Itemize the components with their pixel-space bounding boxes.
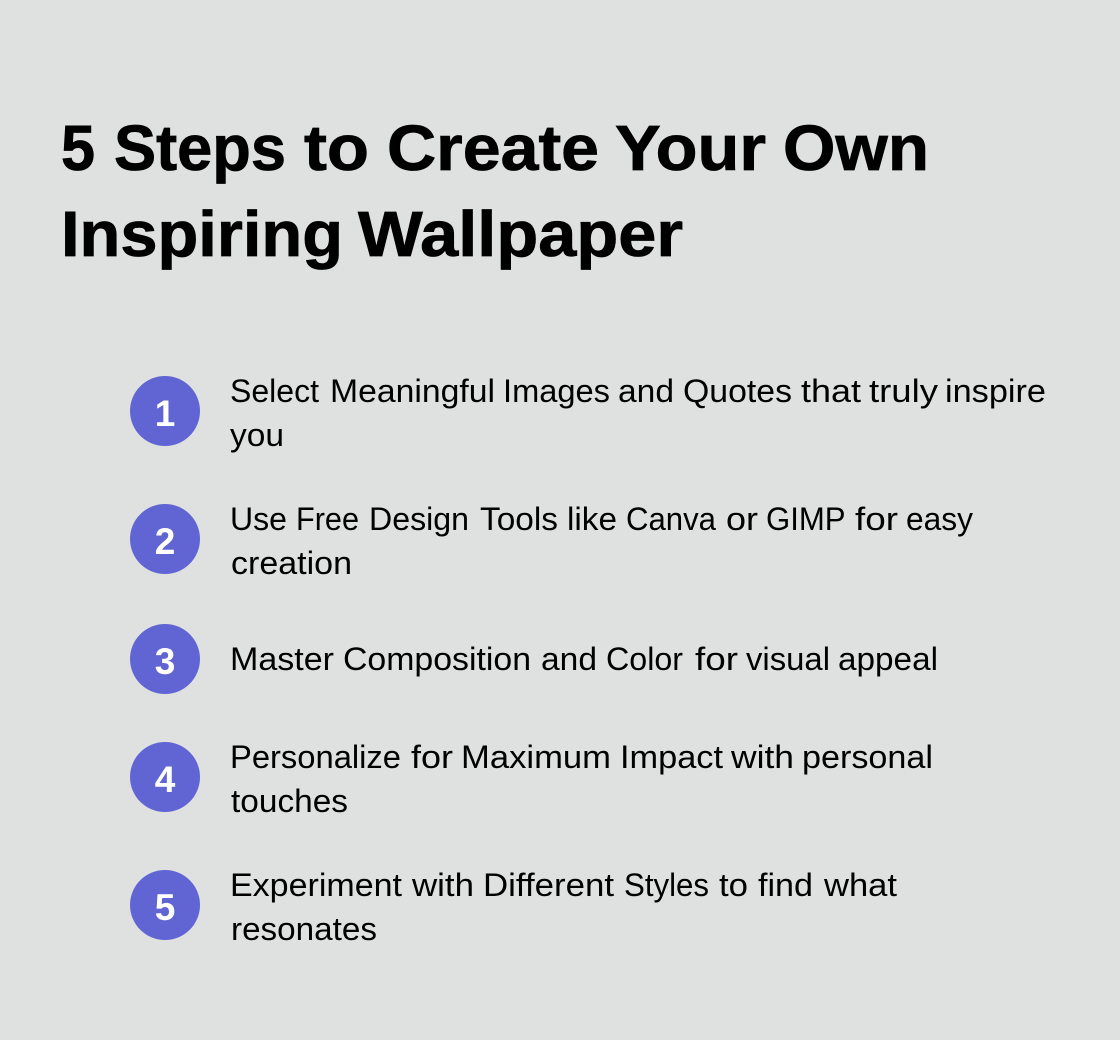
step 2 text bbox=[230, 501, 973, 581]
step 3 text: Master bbox=[230, 641, 334, 677]
step 3 text: appeal bbox=[838, 641, 938, 677]
step 2 text: Use bbox=[230, 501, 287, 537]
step 4 text: touches bbox=[231, 783, 348, 819]
step 1 text: and bbox=[618, 373, 674, 409]
step 5 text bbox=[230, 867, 897, 947]
step 4 number badge: 4 bbox=[155, 759, 176, 800]
title: Inspiring bbox=[61, 198, 343, 270]
title: to bbox=[304, 112, 369, 184]
step 5 text: what bbox=[823, 867, 897, 903]
step 5 text: Styles bbox=[624, 867, 709, 903]
step 2 text: easy bbox=[906, 501, 973, 537]
title bbox=[61, 112, 929, 270]
title: Wallpaper bbox=[358, 198, 683, 270]
step 4 text: Personalize bbox=[230, 739, 401, 775]
step 5 text: find bbox=[758, 867, 813, 903]
step 1 text: you bbox=[230, 417, 284, 453]
step 5 text: resonates bbox=[231, 911, 377, 947]
step 2 number badge bbox=[130, 504, 200, 574]
step 5 text: Experiment bbox=[230, 867, 402, 903]
step 3 text: and bbox=[541, 641, 597, 677]
step 1 text: Images bbox=[503, 373, 610, 409]
step 4 text bbox=[230, 739, 933, 819]
step 4 bbox=[130, 739, 933, 819]
step 1 text: inspire bbox=[945, 373, 1046, 409]
step 2 text: GIMP bbox=[766, 501, 845, 537]
title: Your bbox=[615, 112, 766, 184]
step 5 number badge: 5 bbox=[155, 887, 175, 928]
step 1 number badge: 1 bbox=[155, 393, 175, 434]
step 1 number badge bbox=[130, 376, 200, 446]
step 2 number badge: 2 bbox=[155, 521, 175, 562]
step 1 text: Quotes bbox=[683, 373, 792, 409]
step 2 text: like bbox=[567, 501, 617, 537]
step 4 text: for bbox=[411, 739, 453, 775]
step 3 bbox=[130, 624, 938, 694]
step 2 text: creation bbox=[231, 545, 352, 581]
step 3 number badge: 3 bbox=[155, 641, 175, 682]
step 2 text: Design bbox=[369, 501, 469, 537]
steps list bbox=[130, 373, 1046, 947]
step 2 text: Tools bbox=[480, 501, 558, 537]
step 2 text: or bbox=[726, 501, 758, 537]
step 3 text: Composition bbox=[343, 641, 531, 677]
step 5 text: Different bbox=[483, 867, 614, 903]
step 5 text: to bbox=[719, 867, 748, 903]
step 1 text: that bbox=[801, 373, 861, 409]
step 2 bbox=[130, 501, 973, 581]
step 3 text: Color bbox=[606, 641, 683, 677]
step 1 text bbox=[230, 373, 1046, 453]
step 3 number badge bbox=[130, 624, 200, 694]
step 5 text: with bbox=[411, 867, 474, 903]
step 1 text: Select bbox=[230, 373, 319, 409]
step 4 text: personal bbox=[802, 739, 933, 775]
title: 5 bbox=[61, 112, 95, 184]
step 3 text: for bbox=[695, 641, 738, 677]
step 4 text: with bbox=[730, 739, 794, 775]
step 4 text: Impact bbox=[620, 739, 723, 775]
step 5 number badge bbox=[130, 870, 200, 940]
step 4 number badge bbox=[130, 742, 200, 812]
title: Own bbox=[783, 112, 929, 184]
step 3 text: visual bbox=[746, 641, 830, 677]
title: Steps bbox=[114, 112, 286, 184]
title: Create bbox=[387, 112, 599, 184]
step 1 bbox=[130, 373, 1046, 453]
step 2 text: for bbox=[855, 501, 898, 537]
step 1 text: truly bbox=[869, 373, 938, 409]
step 2 text: Canva bbox=[626, 501, 716, 537]
step 5 bbox=[130, 867, 897, 947]
step 2 text: Free bbox=[296, 501, 359, 537]
step 4 text: Maximum bbox=[461, 739, 611, 775]
step 1 text: Meaningful bbox=[330, 373, 495, 409]
